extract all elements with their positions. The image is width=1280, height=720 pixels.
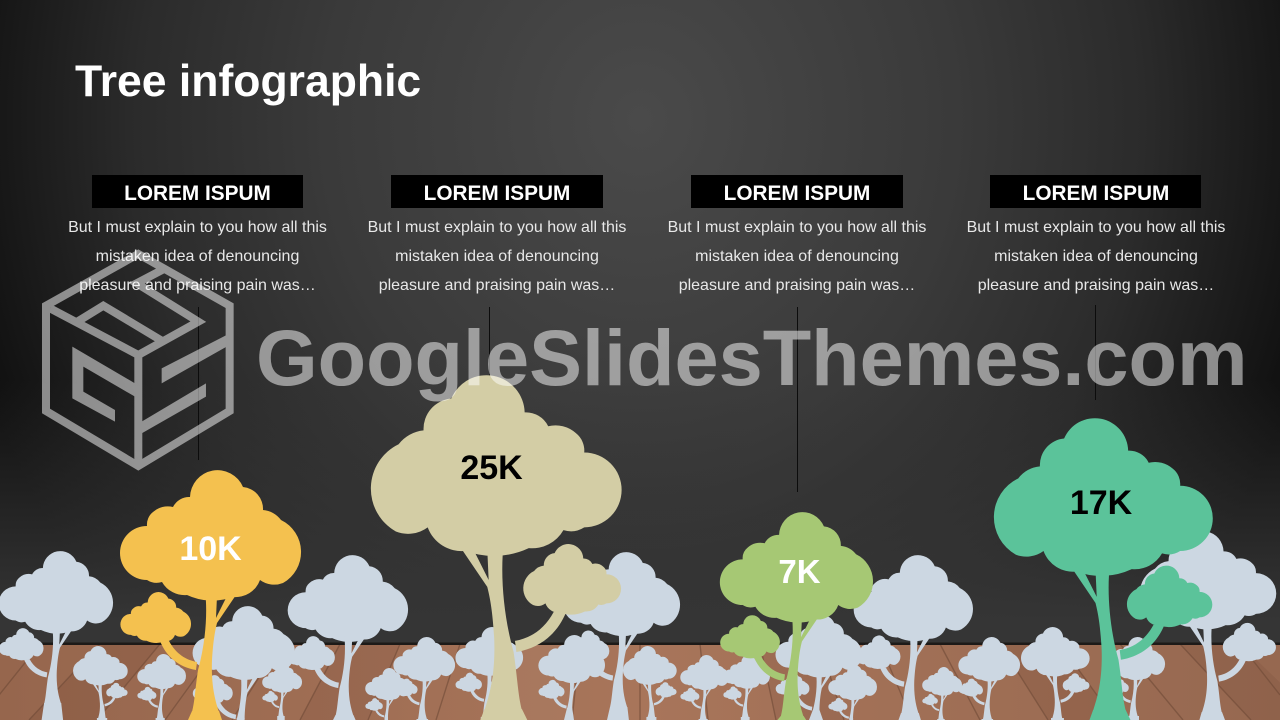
tree: green 17K [994,418,1213,720]
heading bar 4 [990,175,1201,208]
tree: tan 25K [371,375,622,720]
heading bar 3: LOREM ISPUM [724,182,870,205]
column 4 text [967,175,1225,294]
paragraph 3: But I must explain to you how all this [668,219,926,236]
paragraph 2: pleasure and praising pain was… [379,277,615,294]
paragraph 4: But I must explain to you how all this [967,219,1225,236]
heading bar 1 [92,175,303,208]
leader lines [198,305,1096,492]
paragraph 4: mistaken idea of denouncing [994,248,1198,265]
tree: yellow 10K [120,470,301,720]
paragraph 1 [68,219,327,294]
paragraph 2: But I must explain to you how all this [368,219,626,236]
tree: tan 25K: 25K [460,449,523,487]
paragraph 4: pleasure and praising pain was… [978,277,1214,294]
column 1 text [68,175,327,294]
watermark cube logo [46,254,230,467]
paragraph 1: pleasure and praising pain was… [79,277,316,294]
tree: yellow 10K: 10K [179,530,242,568]
paragraph 3 [668,219,926,294]
heading bar 1: LOREM ISPUM [124,182,271,205]
paragraph 3: pleasure and praising pain was… [679,277,915,294]
paragraph 4 [967,219,1225,294]
column 2 text [368,175,626,294]
paragraph 2 [368,219,626,294]
paragraph 1: mistaken idea of denouncing [96,248,299,265]
tree: green 17K: 17K [1070,484,1133,522]
paragraph 1: But I must explain to you how all this [68,219,327,236]
heading bar 3 [691,175,903,208]
heading bar 4: LOREM ISPUM [1023,182,1169,205]
heading bar 2: LOREM ISPUM [424,182,570,205]
wooden floor [0,642,1280,720]
column 3 text [668,175,926,294]
heading bar 2 [391,175,603,208]
grey background forest [0,531,1276,720]
tree: lime 7K [720,512,873,720]
paragraph 2: mistaken idea of denouncing [395,248,599,265]
title: Tree infographic [75,57,421,106]
paragraph 3: mistaken idea of denouncing [695,248,899,265]
tree: lime 7K: 7K [778,553,821,590]
watermark text: GoogleSlidesThemes.com [256,313,1247,402]
